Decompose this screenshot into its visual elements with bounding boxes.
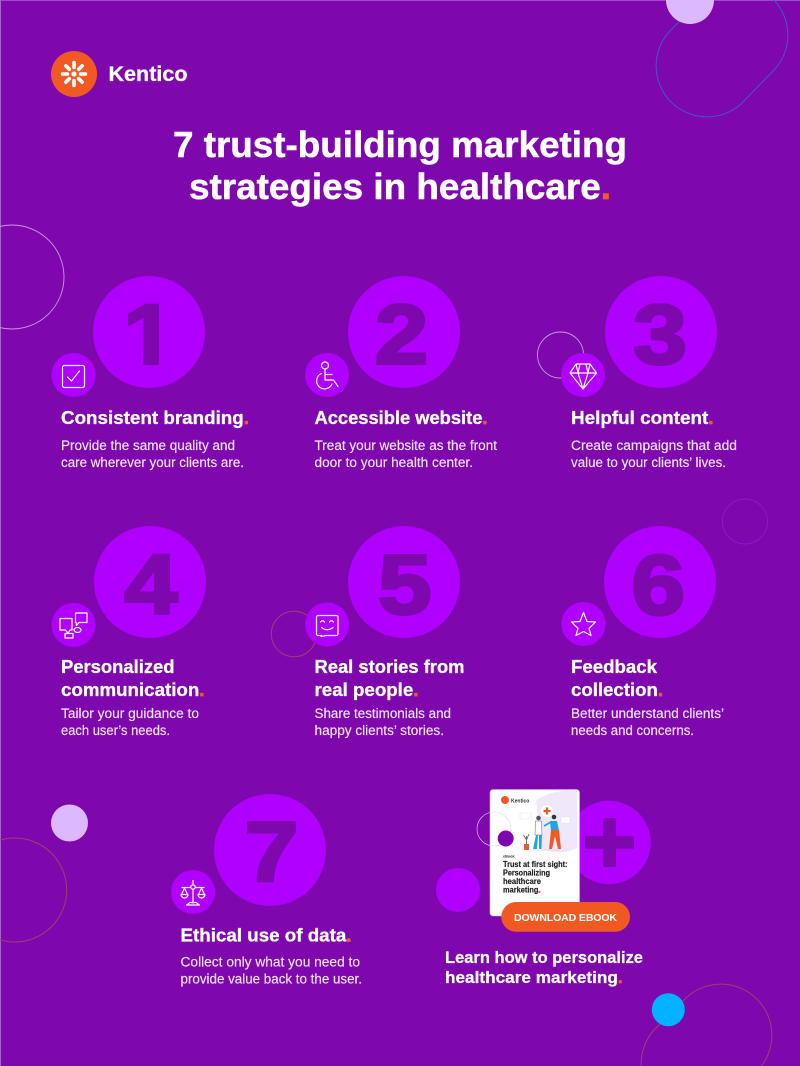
description: [61, 438, 244, 470]
ebook title: Trust at first sight:: [503, 860, 568, 869]
number circle 1: [93, 276, 205, 388]
description: [314, 438, 497, 470]
heading: collection.: [571, 679, 663, 700]
small circle: [436, 868, 480, 912]
number circle 5: [348, 526, 460, 638]
description: Share testimonials and: [314, 706, 451, 721]
description: Collect only what you need to: [180, 955, 360, 970]
description: Better understand clients’: [571, 706, 724, 721]
logo wordmark: Kentico: [108, 63, 188, 86]
icon: Kentico mark: [51, 51, 97, 97]
description: Provide the same quality and: [61, 438, 235, 453]
heading: [61, 656, 204, 700]
description: value to your clients’ lives.: [571, 455, 726, 470]
description: [314, 706, 451, 738]
panel: 4 personalized communication: [52, 526, 206, 738]
number circle 6: [604, 526, 716, 638]
description: needs and concerns.: [571, 723, 694, 738]
title: strategies in healthcare .: [189, 166, 611, 207]
plus circle: [567, 801, 651, 884]
panel: 1 consistent branding: [52, 276, 249, 470]
description: [571, 438, 737, 470]
heading: Accessible website.: [314, 407, 488, 428]
illustration: doctor and patient: [520, 805, 570, 850]
icon: wheelchair: [305, 353, 349, 397]
download button: DOWNLOAD EBOOK: [514, 912, 617, 924]
icon: diamond: [561, 353, 605, 397]
heading: real people.: [314, 679, 418, 700]
number circle 5: 5: [378, 538, 432, 632]
ebook cover: [477, 790, 580, 916]
ebook label: eBook: [503, 854, 515, 858]
panel: 3 helpful content: [561, 276, 737, 470]
ebook title: [503, 860, 568, 894]
title: 7 trust-building marketing: [173, 124, 627, 165]
description: care wherever your clients are.: [61, 455, 244, 470]
description: [571, 706, 724, 738]
description: happy clients’ stories.: [314, 723, 444, 738]
heading: Personalized: [61, 656, 174, 677]
heading: Feedback: [571, 656, 658, 677]
description: [180, 955, 362, 986]
number circle 3: [605, 276, 717, 388]
panel: 2 accessible website: [305, 276, 497, 470]
call to action text: healthcare marketing.: [445, 968, 623, 987]
ebook cover: Kentico: [511, 798, 529, 804]
icon: scales: [171, 870, 215, 914]
number circle 1: 1: [123, 288, 176, 382]
number circle 7: [214, 794, 326, 906]
number circle 2: [348, 276, 460, 388]
description: provide value back to the user.: [180, 972, 362, 986]
title: [173, 124, 627, 207]
icon: checkbox: [52, 353, 96, 397]
description: [61, 706, 199, 738]
number circle 3: 3: [633, 288, 687, 382]
ebook title: healthcare: [503, 877, 542, 886]
heading: Helpful content.: [571, 407, 714, 428]
description: Treat your website as the front: [314, 438, 497, 453]
number circle 7: 7: [244, 804, 298, 898]
icon: star: [562, 602, 606, 646]
description: each user’s needs.: [61, 723, 170, 738]
download button: [501, 902, 630, 932]
icon: speech bubbles: [52, 603, 96, 647]
description: Create campaigns that add: [571, 438, 737, 453]
number circle 4: 4: [124, 538, 178, 632]
heading: Consistent branding.: [61, 407, 249, 428]
number circle 2: 2: [375, 288, 428, 382]
ebook title: marketing.: [503, 886, 540, 894]
call to action text: Learn how to personalize: [445, 948, 643, 967]
heading: communication.: [61, 679, 204, 700]
ebook title: Personalizing: [503, 868, 550, 878]
heading: [314, 656, 464, 700]
logo: Kentico: [51, 51, 188, 97]
panel: ebook call to action: [436, 790, 651, 987]
call to action text: [445, 948, 643, 987]
number circle 4: [94, 526, 206, 638]
description: door to your health center.: [314, 455, 473, 470]
description: Tailor your guidance to: [61, 706, 199, 721]
heading: Real stories from: [314, 656, 464, 677]
panel: 7 ethical use of data: [171, 794, 362, 986]
heading: Ethical use of data.: [180, 925, 352, 946]
number circle 6: 6: [632, 538, 685, 632]
icon: smiling chat bubble: [305, 602, 349, 646]
panel: 6 feedback collection: [562, 526, 724, 738]
panel: 5 real stories: [305, 526, 464, 738]
heading: [571, 656, 663, 700]
